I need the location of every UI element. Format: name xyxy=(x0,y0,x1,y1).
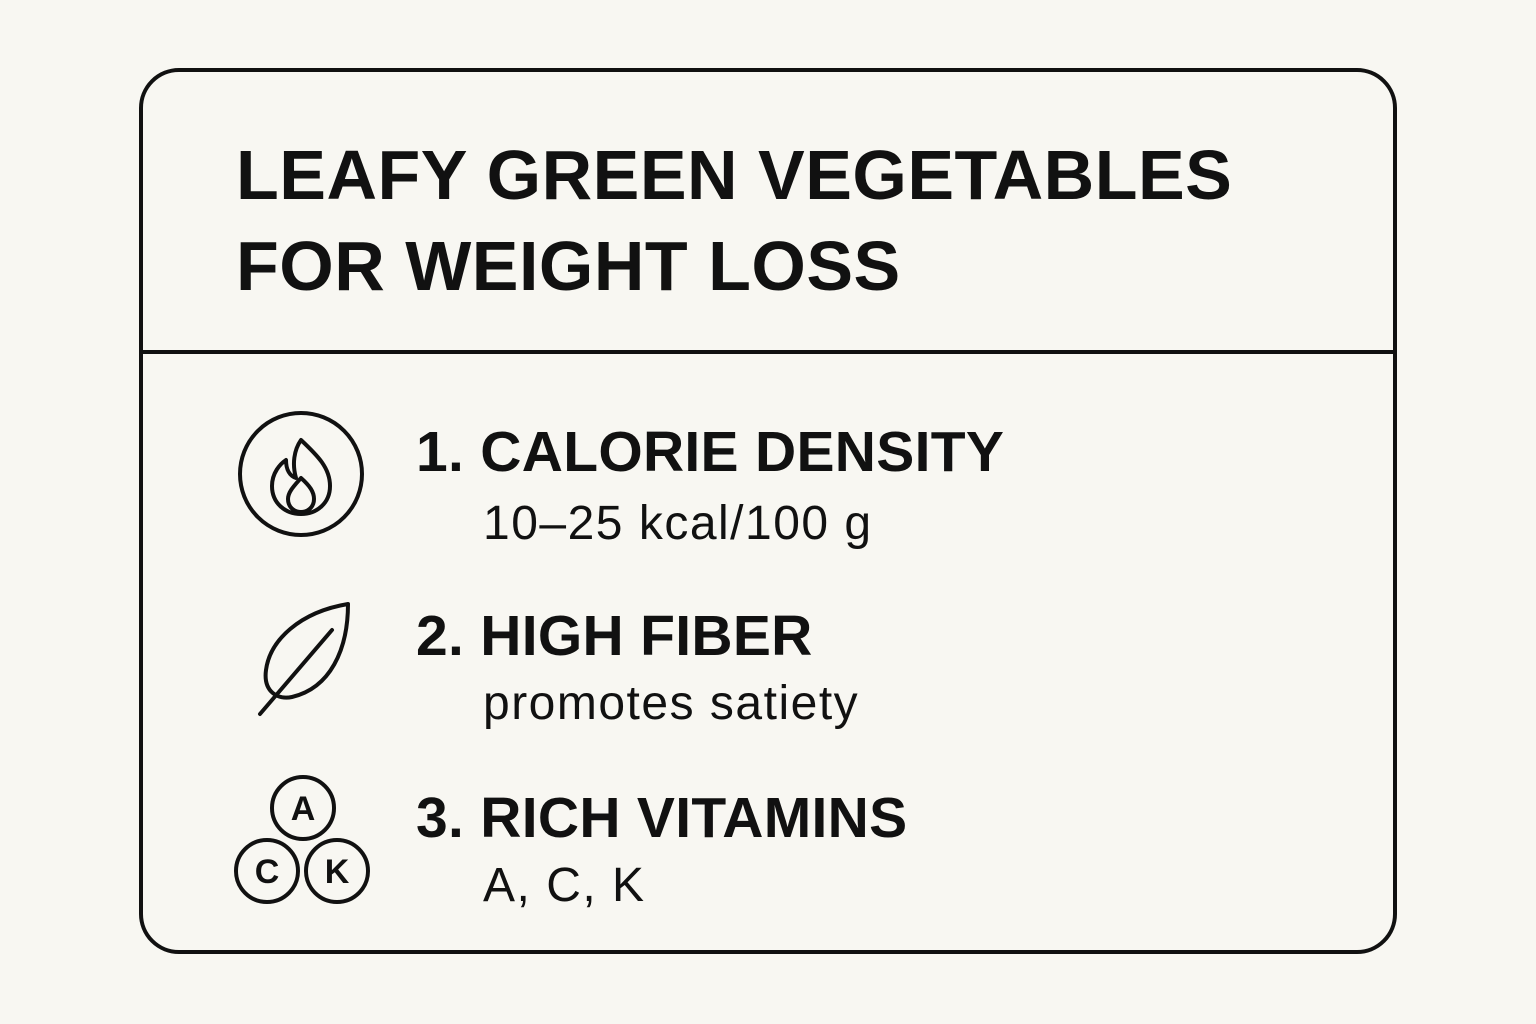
text: satiety: promotes satiety xyxy=(483,677,859,730)
icon: leaf xyxy=(260,604,348,714)
title: FOR WEIGHT LOSS xyxy=(236,227,901,305)
heading: rich vitamins: 3. RICH VITAMINS xyxy=(416,786,907,850)
title: LEAFY GREEN VEGETABLES xyxy=(236,136,1232,214)
icon: vitamins A C K: C xyxy=(255,853,279,891)
text: vitamins: A, C, K xyxy=(483,859,646,912)
heading: high fiber: 2. HIGH FIBER xyxy=(416,604,813,668)
card panel xyxy=(139,68,1397,954)
title xyxy=(236,136,1232,305)
heading: calorie density: 1. CALORIE DENSITY xyxy=(416,420,1004,484)
text: kcal: 10–25 kcal/100 g xyxy=(483,497,873,550)
icon: vitamins A C K: A xyxy=(291,790,315,828)
icon: vitamins A C K: K xyxy=(325,853,350,891)
icon: vitamins A C K xyxy=(236,777,368,902)
icon: flame xyxy=(240,413,362,535)
